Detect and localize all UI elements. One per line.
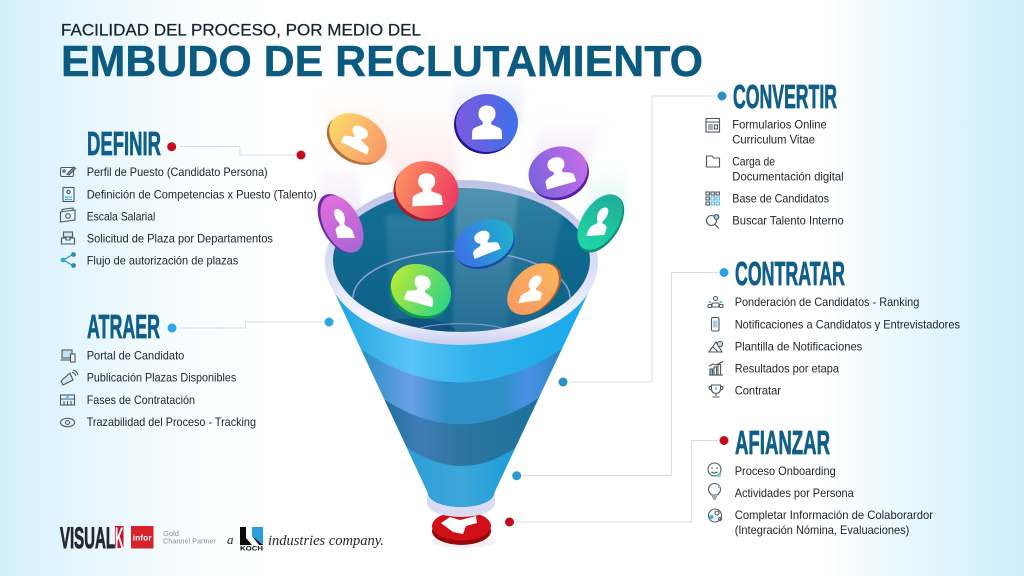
icon: laptop and phone [60, 350, 75, 362]
panel: contratar [512, 256, 960, 480]
text: carga de: Carga de [732, 156, 775, 169]
connector: afianzar [505, 436, 728, 526]
heading: atraer: ATRAER [87, 309, 160, 346]
funnel interior [333, 188, 590, 332]
icon: share nodes [61, 252, 76, 268]
coin: blue middle [447, 210, 522, 278]
light shafts above the funnel [318, 78, 628, 220]
title: EMBUDO DE RECLUTAMIENTO [61, 38, 703, 86]
logo: visualk [60, 522, 124, 555]
coin: green lower left [381, 255, 459, 328]
heading: contratar: CONTRATAR [735, 256, 845, 293]
icon: template pyramid [709, 341, 723, 352]
text: a: a [227, 532, 234, 547]
text: industries company: industries company. [268, 533, 384, 549]
logo: koch: KOCH [240, 546, 263, 552]
text: buscar talento interno: Buscar Talento Interno [732, 215, 844, 228]
connector: contratar [512, 268, 728, 480]
text: notificaciones: Notificaciones a Candidatos y Entrevistadores [735, 318, 960, 331]
icon: inbox tray [62, 232, 74, 244]
text: flujo de autorizacion: Flujo de autorización de plazas [87, 255, 238, 268]
icon: bar chart growth [709, 362, 723, 375]
text: gold channel partner [163, 529, 217, 546]
text: contratar: Contratar [735, 385, 781, 398]
funnel base disc [432, 512, 496, 548]
text: actividades por persona: Actividades por Persona [735, 487, 854, 500]
text: documentacion digital: Documentación digital [732, 170, 844, 183]
text: integracion nomina: (Integración Nómina, Evaluaciones) [735, 524, 909, 537]
heading: convertir: CONVERTIR [733, 79, 837, 116]
logo: visualk: VISUAL [60, 522, 115, 555]
text: gold channel partner: Gold [163, 529, 179, 538]
coin: purple right [521, 138, 596, 208]
icon: search talent [706, 215, 719, 228]
connector: definir [167, 142, 306, 160]
icon: notebook [63, 188, 74, 202]
text: escala salarial: Escala Salarial [87, 210, 155, 223]
panel: afianzar [505, 425, 933, 537]
icon: calendar phases [60, 395, 74, 405]
icon: folder [706, 156, 720, 167]
logo: infor [131, 526, 154, 548]
coin: indigo top [454, 94, 518, 154]
subtitle: FACILIDAD DEL PROCESO, POR MEDIO DEL [61, 22, 421, 40]
funnel rim [325, 180, 598, 345]
icon: banknote [60, 208, 75, 222]
icon: megaphone [61, 370, 78, 385]
panel: definir [60, 126, 317, 268]
funnel cone bands [334, 292, 589, 507]
coin: magenta left [309, 187, 372, 260]
text: solicitud de plaza: Solicitud de Plaza por Departamentos [87, 233, 273, 246]
icon: eye [60, 418, 74, 427]
text: base de candidatos: Base de Candidatos [732, 193, 829, 206]
text: definicion de competencias: Definición de Competencias x Puesto (Talento) [87, 188, 317, 201]
logo: koch [240, 527, 263, 552]
footer logos: K [115, 522, 124, 555]
panel: convertir [558, 79, 844, 386]
text: completar informacion: Completar Información de Colaborardor [735, 509, 933, 522]
icon: mobile phone [712, 318, 719, 331]
funnel illustration [300, 78, 634, 570]
icon: smiling face [708, 463, 721, 477]
text: ponderacion: Ponderación de Candidatos - Ranking [735, 296, 919, 309]
text: resultados por etapa: Resultados por etapa [735, 362, 840, 375]
logo: infor: infor [133, 532, 152, 542]
footer logos [60, 522, 384, 555]
connector: atraer [168, 318, 334, 332]
text: publicacion plazas: Publicación Plazas Disponibles [87, 372, 236, 385]
icon: online form [706, 118, 720, 132]
panel: atraer [60, 309, 334, 429]
text: curriculum vitae: Curriculum Vitae [732, 133, 815, 146]
icon: trophy [709, 385, 723, 397]
icon: profile card [60, 167, 76, 176]
text: formularios online: Formularios Online [732, 119, 827, 132]
coin: orange lower right [497, 253, 571, 325]
icon: grid of candidates [706, 192, 719, 205]
text: proceso onboarding: Proceso Onboarding [735, 465, 836, 478]
icon: collaborator information [708, 509, 722, 522]
text: fases de contratacion: Fases de Contratación [87, 394, 195, 407]
text: gold channel partner: Channel Partner [163, 536, 217, 546]
text: portal de candidato: Portal de Candidato [87, 349, 184, 362]
funnel neck collar [427, 490, 495, 517]
connector: convertir [558, 92, 726, 386]
text: perfil de puesto: Perfil de Puesto (Candidato Persona) [87, 166, 268, 179]
heading: afianzar: AFIANZAR [735, 425, 830, 462]
coin: orange top left [318, 103, 396, 175]
text: plantilla: Plantilla de Notificaciones [735, 340, 862, 353]
heading: definir: DEFINIR [87, 126, 161, 163]
icon: ranking people [708, 296, 723, 308]
coin: red centre [385, 152, 467, 230]
coin: teal right [568, 186, 634, 261]
text: trazabilidad: Trazabilidad del Proceso - Tracking [87, 416, 256, 429]
icon: light bulb [708, 484, 720, 499]
